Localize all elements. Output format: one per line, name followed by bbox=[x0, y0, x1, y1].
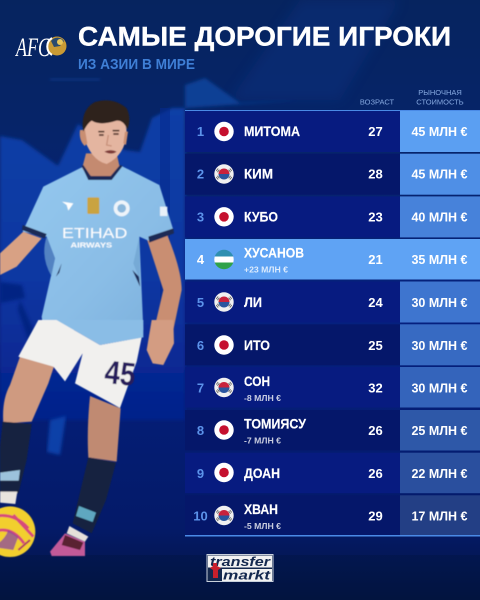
column headers bbox=[360, 88, 464, 106]
icon: football bbox=[0, 506, 35, 557]
row 7 bbox=[185, 367, 480, 408]
row 10 bbox=[185, 495, 480, 535]
logo: AFC: AFC bbox=[15, 33, 50, 62]
row 6: 30 МЛН € bbox=[411, 339, 468, 353]
row 10: 29 bbox=[368, 508, 383, 524]
row 9: 22 МЛН € bbox=[411, 467, 468, 481]
row 1: 45 МЛН € bbox=[411, 125, 468, 139]
row 6: 25 bbox=[368, 338, 383, 353]
row 2 bbox=[185, 154, 480, 195]
row 3: КУБО bbox=[244, 209, 278, 224]
row 6 bbox=[185, 324, 480, 365]
row 9: 9 bbox=[197, 466, 204, 481]
row 1: 27 bbox=[368, 124, 383, 139]
title: САМЫЕ ДОРОГИЕ ИГРОКИ bbox=[78, 22, 451, 52]
header: age: ВОЗРАСТ bbox=[360, 98, 395, 106]
row 10: 17 МЛН € bbox=[411, 510, 468, 524]
row 8 bbox=[185, 410, 480, 450]
row 5: 30 МЛН € bbox=[411, 296, 468, 310]
row 2: КИМ bbox=[244, 167, 273, 182]
row 4: highlighted: 35 МЛН € bbox=[411, 253, 468, 267]
row 10: 10 bbox=[193, 508, 208, 524]
row 10: -5 МЛН € bbox=[244, 522, 282, 531]
row 3: 3 bbox=[197, 209, 204, 224]
row 9 bbox=[185, 453, 480, 493]
row 4: highlighted bbox=[185, 239, 480, 280]
row 7: 30 МЛН € bbox=[411, 382, 468, 396]
row 1: МИТОМА bbox=[244, 124, 300, 139]
shirt sponsor: ETIHAD bbox=[62, 226, 127, 242]
shirt sponsor line two: AIRWAYS bbox=[70, 241, 112, 250]
row 10: ХВАН bbox=[244, 502, 278, 517]
row 1 bbox=[185, 111, 480, 152]
row 7: -8 МЛН € bbox=[244, 394, 282, 403]
row 2: 28 bbox=[368, 167, 383, 182]
row 5: ЛИ bbox=[244, 295, 262, 310]
logo: Transfermarkt bbox=[207, 554, 273, 582]
row 1: 1 bbox=[197, 124, 204, 139]
row 2: 2 bbox=[197, 167, 204, 182]
row 4: highlighted: 21 bbox=[368, 252, 383, 267]
row 6: ИТО bbox=[244, 338, 270, 353]
subtitle: ИЗ АЗИИ В МИРЕ bbox=[78, 56, 195, 73]
shorts number: 45 bbox=[103, 353, 137, 393]
row 7: 7 bbox=[197, 380, 204, 396]
row 8: 26 bbox=[368, 423, 383, 438]
player lower body bbox=[0, 320, 174, 557]
row 4: highlighted: +23 МЛН € bbox=[244, 266, 289, 274]
row 8: 25 МЛН € bbox=[411, 424, 468, 438]
row 3: 40 МЛН € bbox=[411, 210, 468, 224]
row 2: 45 МЛН € bbox=[411, 168, 468, 182]
row 7: 32 bbox=[368, 380, 383, 396]
header: market value bbox=[416, 88, 464, 106]
row 9: 26 bbox=[368, 466, 383, 481]
row 6: 6 bbox=[197, 338, 204, 353]
icon: AFC ball bbox=[47, 36, 66, 56]
row 9: ДОАН bbox=[244, 466, 280, 481]
icon: red figure bbox=[210, 563, 221, 578]
header: market value: СТОИМОСТЬ bbox=[416, 98, 464, 106]
row 5: 24 bbox=[368, 295, 383, 310]
row 3: 23 bbox=[368, 209, 383, 224]
row 4: highlighted: 4 bbox=[197, 252, 205, 267]
row 8: 8 bbox=[197, 423, 204, 438]
logo: Transfermarkt: transfer bbox=[210, 555, 271, 569]
row 3 bbox=[185, 196, 480, 237]
ranking table bbox=[185, 110, 480, 536]
logo: Transfermarkt: markt bbox=[223, 568, 271, 582]
row 8: ТОМИЯСУ bbox=[244, 416, 307, 432]
header: market value: РЫНОЧНАЯ bbox=[418, 88, 462, 97]
row 8: -7 МЛН € bbox=[244, 436, 282, 446]
player photo bbox=[0, 100, 182, 557]
row 4: highlighted: ХУСАНОВ bbox=[244, 246, 304, 260]
row 5 bbox=[185, 282, 480, 322]
row 5: 5 bbox=[197, 295, 204, 310]
row 7: СОН bbox=[244, 374, 270, 389]
player upper body bbox=[0, 100, 182, 330]
